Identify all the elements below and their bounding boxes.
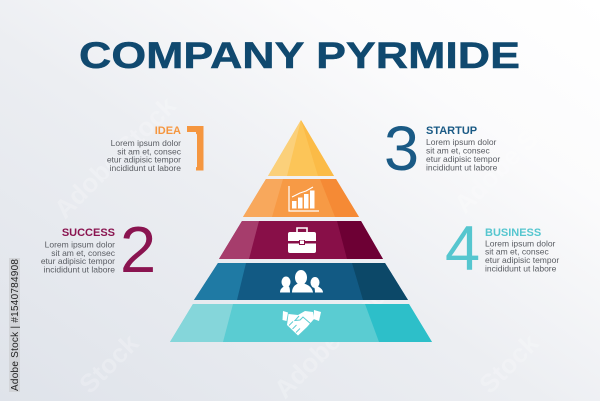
number 1: 1: [182, 113, 218, 186]
watermark: Adobe Stock: [268, 270, 402, 401]
tier 5: handshake: [170, 304, 432, 342]
success body: incididunt ut labore: [44, 264, 115, 274]
watermark: Adobe Stock: [48, 90, 182, 224]
business body: incididunt ut labore: [485, 263, 557, 273]
success body: Lorem ipsum dolor: [45, 240, 115, 250]
block 4: business: [485, 227, 559, 273]
heading: success: SUCCESS: [62, 227, 115, 239]
idea body: etur adipisic tempor: [107, 155, 181, 165]
heading: idea: IDEA: [155, 125, 181, 137]
startup body: etur adipisic tempor: [426, 154, 500, 164]
icon: handshake: [282, 310, 321, 336]
block 1: idea: [107, 125, 182, 173]
number 3: 3: [384, 114, 419, 184]
watermark: Adobe Stock: [448, 85, 582, 219]
number 2: 2: [120, 213, 156, 286]
business body: etur adipisic tempor: [485, 255, 559, 265]
number 1: [187, 126, 204, 170]
heading: business: BUSINESS: [485, 227, 541, 239]
pyramid: [170, 120, 432, 342]
icon: people: [280, 270, 323, 292]
heading: startup: STARTUP: [426, 125, 477, 137]
tier 4: team: [194, 263, 408, 300]
icon: briefcase: [288, 228, 316, 253]
idea body: sit am et, consec: [117, 146, 182, 156]
icon: bar chart: [289, 186, 319, 211]
idea body: [107, 138, 182, 173]
tier 3: briefcase: [219, 221, 383, 259]
block 3: startup: [426, 125, 500, 172]
number 4: 4: [445, 214, 480, 284]
stock credit: Adobe Stock | #1540784908: [10, 259, 21, 391]
watermark: Stock: [473, 328, 545, 399]
block 2: success: [41, 227, 116, 274]
startup body: [426, 137, 500, 172]
startup body: incididunt ut labore: [426, 162, 498, 172]
idea body: Lorem ipsum dolor: [111, 138, 181, 148]
idea body: incididunt ut labore: [110, 163, 181, 173]
success body: [41, 240, 116, 274]
startup body: Lorem ipsum dolor: [426, 137, 497, 147]
startup body: sit am et, consec: [426, 146, 491, 156]
business body: [485, 238, 559, 273]
business body: sit am et, consec: [485, 247, 550, 257]
tier 2: chart: [243, 179, 359, 217]
success body: sit am et, consec: [51, 248, 116, 258]
tier 1: idea: [268, 120, 334, 176]
watermark: Stock: [73, 328, 145, 399]
title: COMPANY PYRMIDE: [79, 34, 520, 76]
business body: Lorem ipsum dolor: [485, 238, 556, 248]
success body: etur adipisic tempor: [41, 256, 115, 266]
